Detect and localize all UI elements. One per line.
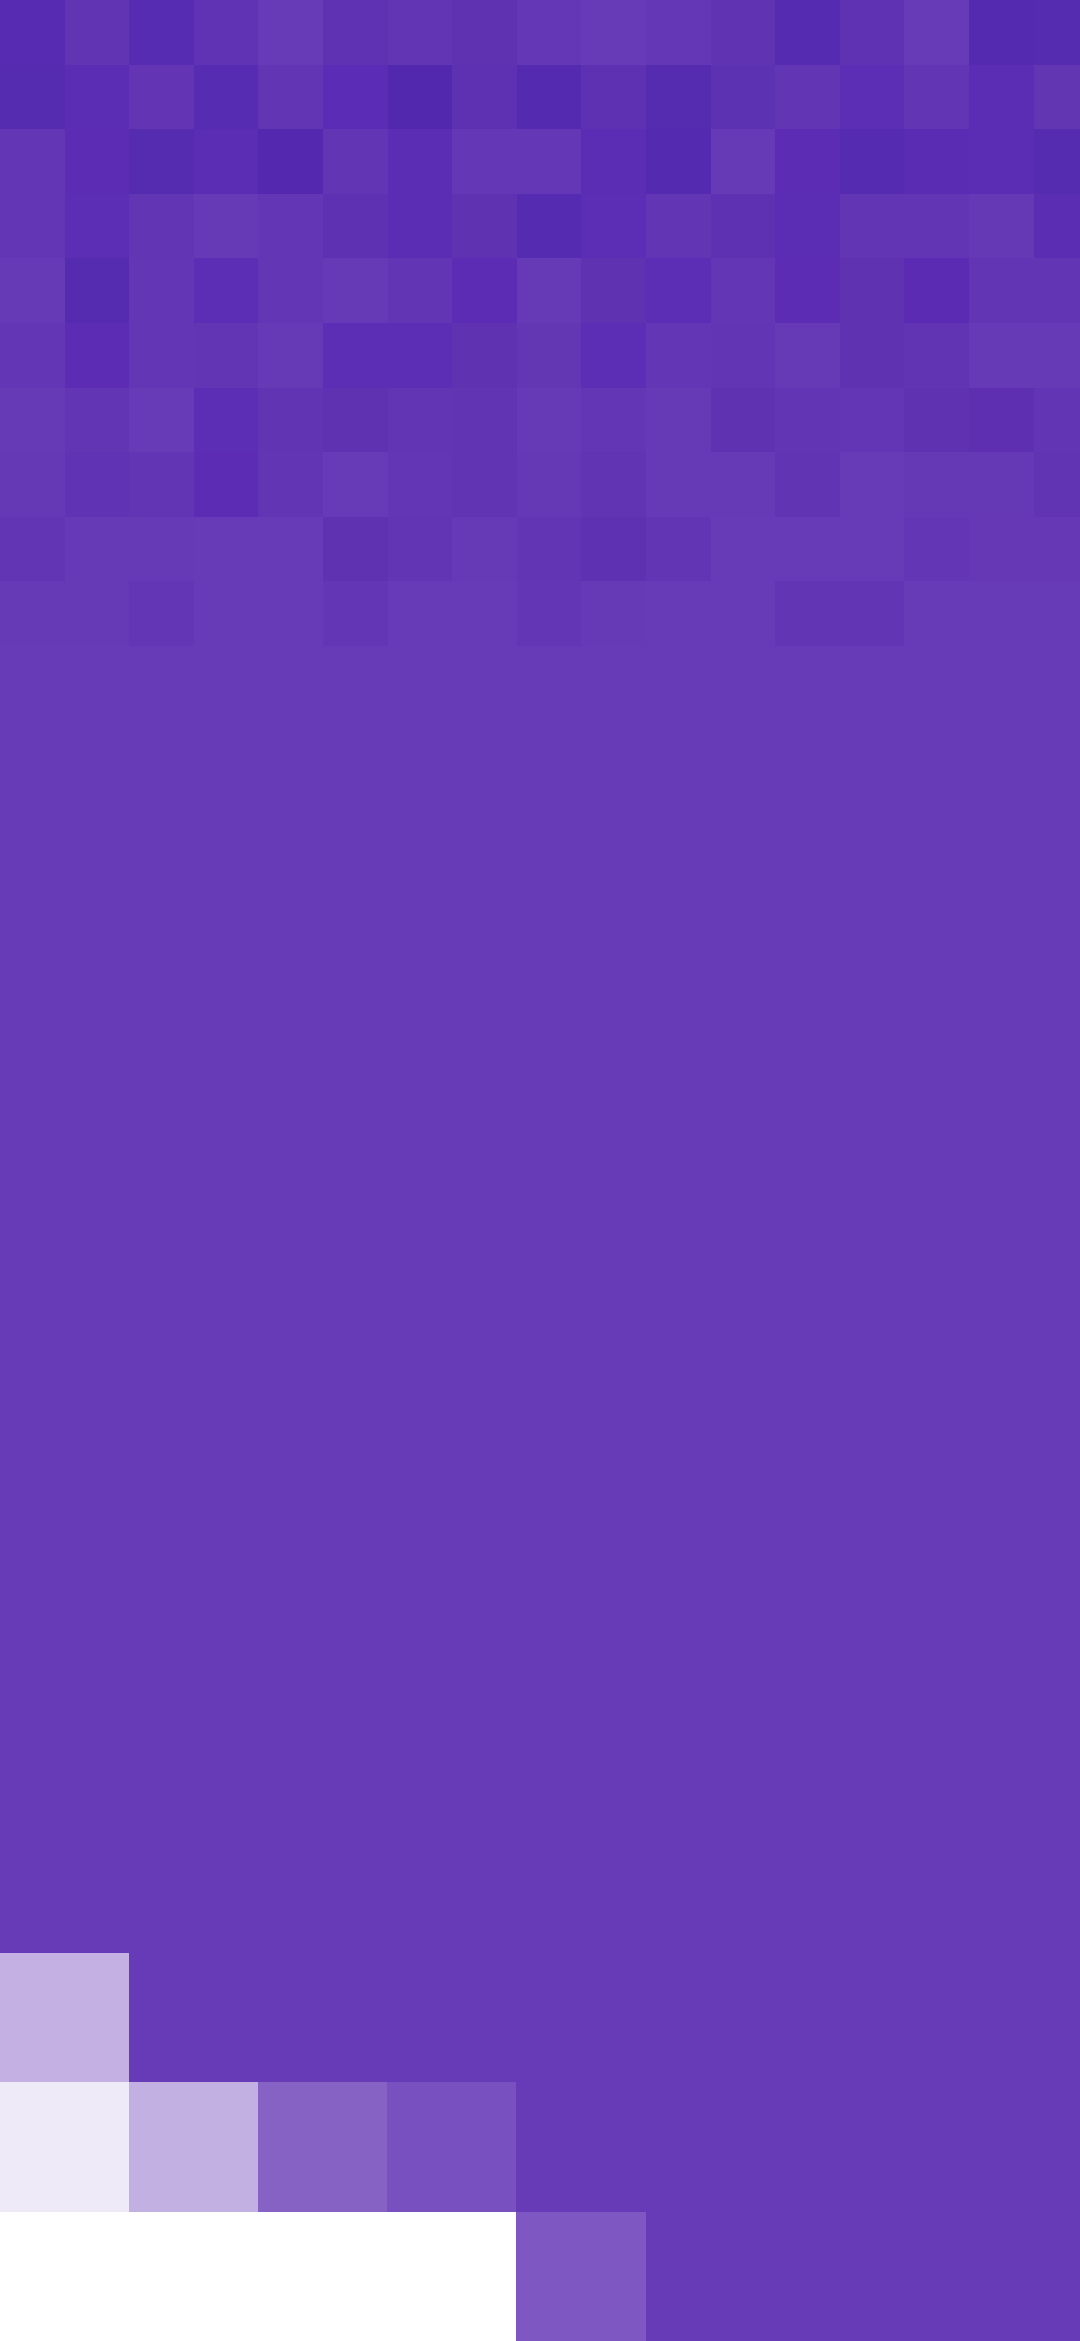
mosaic: fading dark purple squares at top: [0, 0, 1080, 581]
square: row 2 pale lavender: [0, 2082, 129, 2212]
square: row 3 violet: [516, 2212, 646, 2341]
square: row 2 medium purple: [258, 2082, 387, 2212]
square: row 1 lilac: [0, 1953, 129, 2082]
block: row 3 white: [0, 2212, 516, 2341]
square: row 2 lilac: [129, 2082, 258, 2212]
square: row 2 violet: [387, 2082, 516, 2212]
mosaic: large light squares at bottom left: [0, 1953, 646, 2341]
